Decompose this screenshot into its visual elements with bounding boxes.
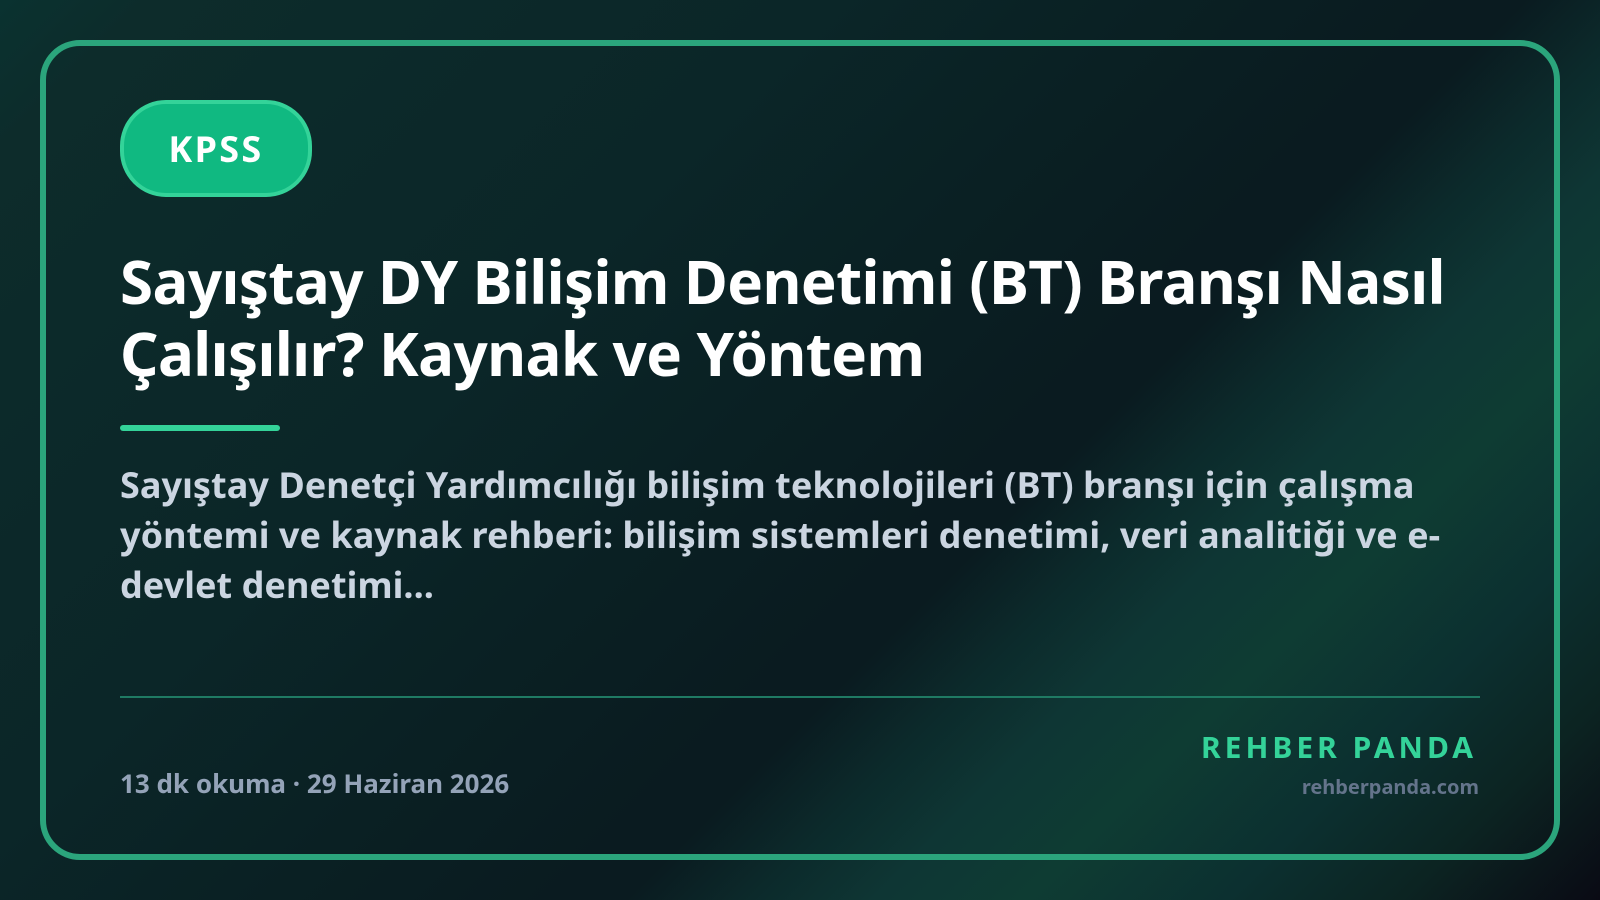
footer divider (120, 696, 1480, 698)
description: Sayıştay Denetçi Yardımcılığı bilişim teknolojileri (BT) branşı için çalışma (120, 460, 1415, 509)
website: rehberpanda.com (1302, 773, 1479, 800)
accent bar (120, 425, 280, 431)
brand name: REHBER PANDA (1201, 726, 1477, 767)
badge: KPSS: KPSS (168, 124, 264, 173)
description: devlet denetimi... (120, 560, 434, 609)
title (120, 240, 1445, 394)
title: Sayıştay DY Bilişim Denetimi (BT) Branşı Nasıl (120, 240, 1445, 322)
badge: KPSS (120, 100, 312, 197)
reading time and date: 13 dk okuma · 29 Haziran 2026 (120, 765, 509, 801)
description: yöntemi ve kaynak rehberi: bilişim sistemleri denetimi, veri analitiği ve e- (120, 510, 1440, 559)
description (120, 460, 1440, 609)
title: Çalışılır? Kaynak ve Yöntem (120, 312, 924, 394)
